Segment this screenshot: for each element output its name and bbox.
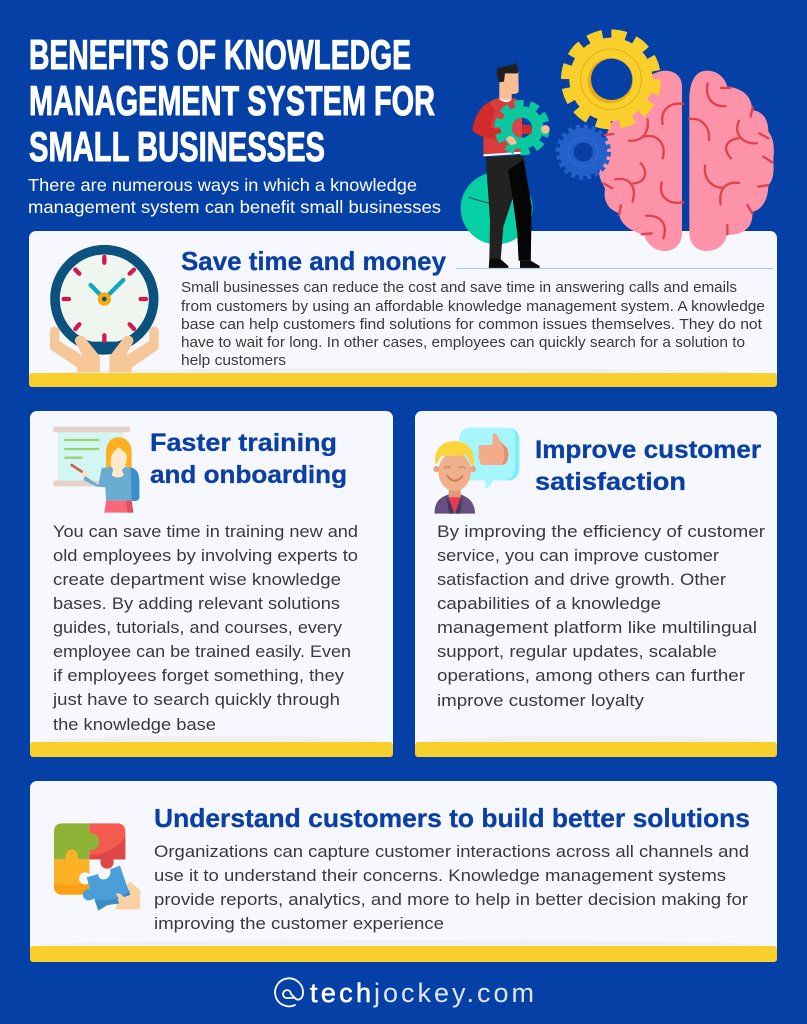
body text: have to wait for long. In other cases, employees can quickly search for a solution to	[181, 335, 745, 351]
body text: improving the customer experience	[154, 914, 444, 933]
body text: improve customer loyalty	[437, 691, 645, 710]
subtitle: There are numerous ways in which a knowledge	[28, 175, 417, 195]
footer logo: techjockey.com: jockey.com	[373, 978, 534, 1008]
card background	[30, 411, 393, 757]
body text: from customers by using an affordable knowledge management system. A knowledge	[181, 299, 765, 315]
man	[472, 63, 540, 269]
body text: management platform like multilingual	[437, 618, 757, 637]
body text	[154, 842, 749, 933]
illustration: man holding gear and brain with gears	[461, 34, 774, 269]
body text	[181, 280, 765, 369]
body text: Small businesses can reduce the cost and save time in answering calls and emails	[181, 280, 737, 296]
body text: bases. By adding relevant solutions	[53, 594, 340, 613]
body text: By improving the efficiency of customer	[437, 522, 765, 541]
body text: help customers	[181, 353, 286, 369]
body text: provide reports, analytics, and more to help in better decision making for	[154, 890, 748, 909]
panel: improve customer satisfaction	[415, 411, 777, 757]
icon: presenter at whiteboard	[53, 427, 139, 513]
body text: Organizations can capture customer interactions across all channels and	[154, 842, 749, 861]
title	[29, 31, 435, 170]
body text: support, regular updates, scalable	[437, 642, 717, 661]
body text: operations, among others can further	[437, 666, 745, 685]
body text	[437, 522, 765, 710]
icon: smiling person with thumbs up bubble	[433, 428, 519, 514]
panel: save time and money content	[50, 246, 773, 372]
footer logo: techjockey.com	[275, 978, 534, 1008]
body text: just have to search quickly through	[52, 690, 340, 709]
icon: at sign	[275, 978, 303, 1006]
heading: satisfaction	[535, 468, 686, 496]
blue gear	[558, 127, 609, 177]
icon: clock held by hands	[50, 250, 159, 372]
heading: Understand customers to build better solutions	[154, 803, 750, 833]
heading: and onboarding	[150, 461, 347, 489]
body text: satisfaction and drive growth. Other	[437, 570, 726, 589]
panel: faster training and onboarding	[30, 411, 393, 757]
heading	[150, 429, 347, 489]
body text: capabilities of a knowledge	[437, 594, 661, 613]
footer logo: techjockey.com: tech	[310, 978, 371, 1008]
heading: Improve customer	[535, 436, 761, 464]
brain	[599, 71, 774, 251]
body text: employee can be trained easily. Even	[53, 642, 351, 661]
body text: old employees by involving experts to	[53, 546, 358, 565]
yellow gear	[566, 34, 656, 124]
green gear held by man	[499, 104, 550, 151]
body text: use it to understand their concerns. Knowledge management systems	[154, 866, 726, 885]
body text: if employees forget something, they	[53, 666, 345, 685]
title: SMALL BUSINESSES	[29, 123, 325, 170]
divider and heading: Save time and money	[181, 246, 447, 276]
body text: base can help customers find solutions for common issues themselves. They do not	[181, 317, 762, 333]
body text: create department wise knowledge	[53, 570, 341, 589]
heading: Faster training	[150, 429, 337, 457]
body text: You can save time in training new and	[53, 522, 358, 541]
icon: puzzle pieces with hand	[54, 823, 140, 911]
panel: understand customers	[30, 781, 777, 962]
title: MANAGEMENT SYSTEM FOR	[29, 77, 435, 124]
subtitle: management system can benefit small businesses	[28, 197, 441, 217]
body text	[52, 522, 358, 734]
panel: save time and money background	[29, 231, 777, 387]
card background	[415, 411, 777, 757]
heading	[535, 436, 761, 496]
card background	[30, 781, 777, 962]
body text: guides, tutorials, and courses, every	[53, 618, 343, 637]
subtitle	[28, 175, 441, 217]
green circle behind man	[461, 172, 533, 244]
title: BENEFITS OF KNOWLEDGE	[29, 31, 411, 78]
body text: service, you can improve customer	[437, 546, 719, 565]
body text: the knowledge base	[53, 715, 216, 734]
